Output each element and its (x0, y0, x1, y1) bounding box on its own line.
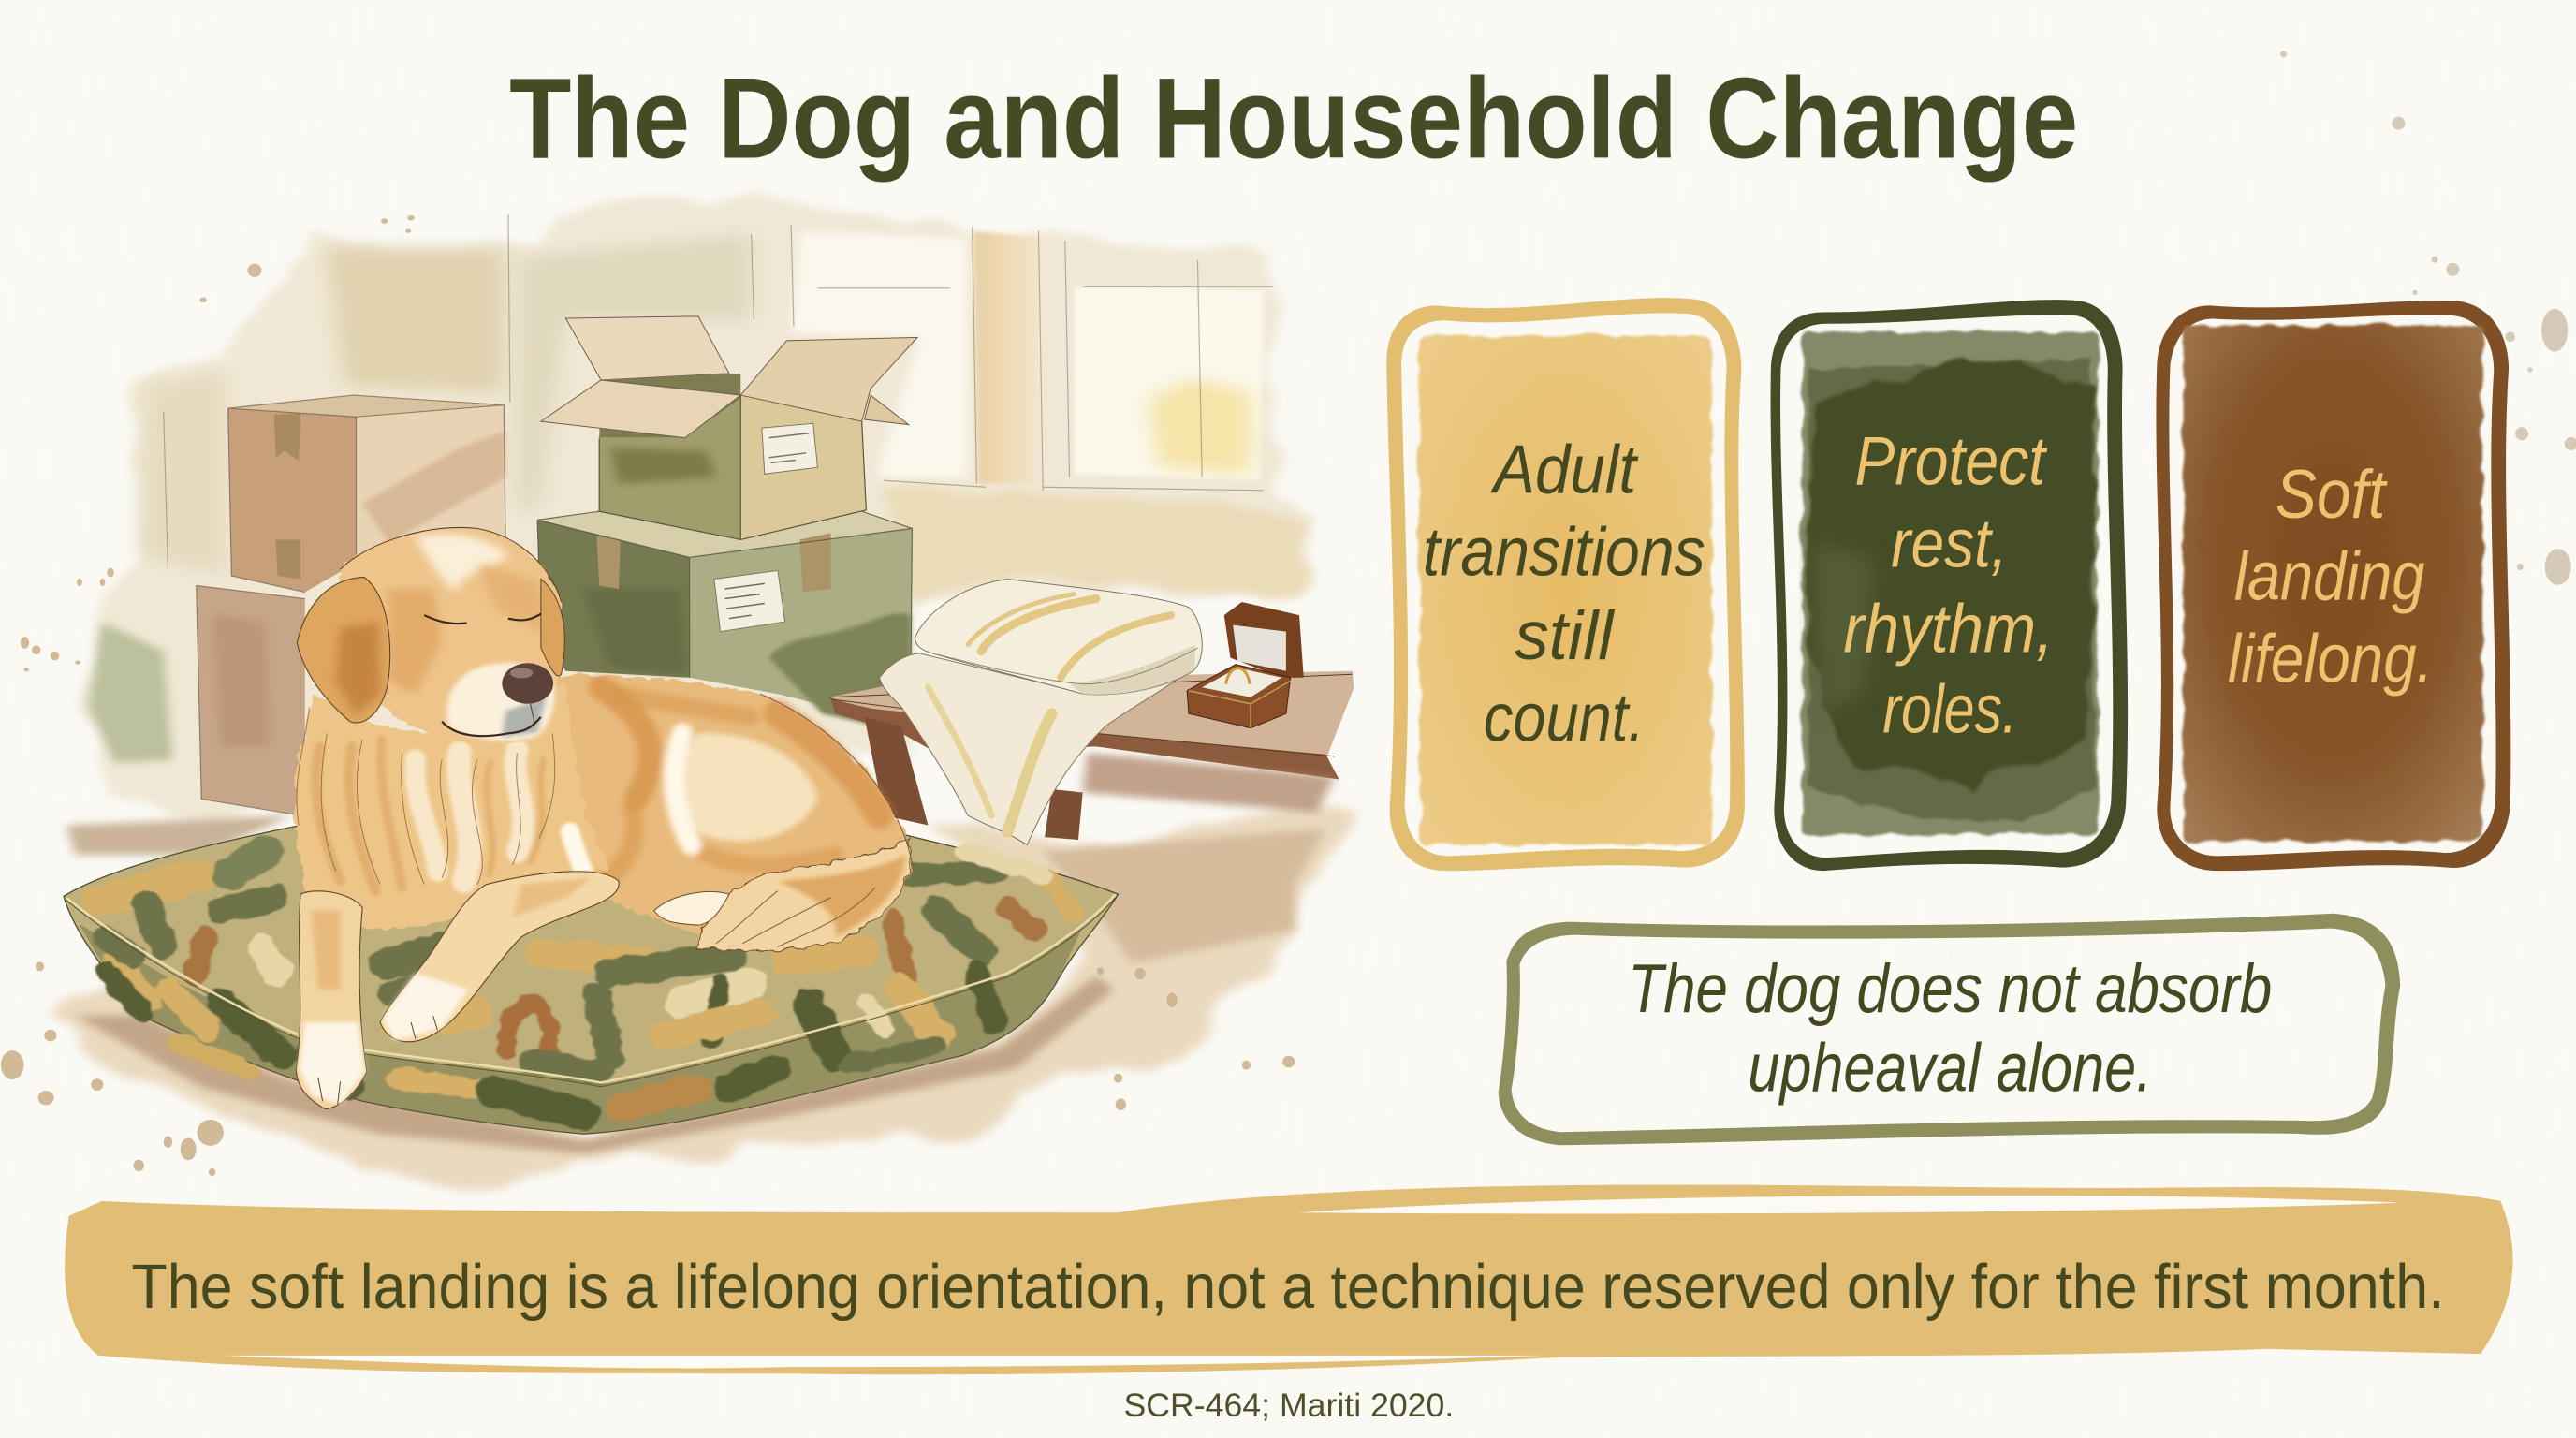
card text: still (1515, 596, 1616, 674)
card text: transitions (1423, 512, 1705, 590)
nose (502, 663, 553, 704)
camouflage dog cushion (64, 826, 1118, 1134)
card border (2156, 301, 2510, 871)
card text (1423, 431, 1705, 756)
callout border (1499, 914, 2400, 1145)
box: lower left (197, 586, 305, 815)
golden retriever (295, 527, 912, 1109)
ring box (1187, 602, 1304, 728)
background watercolor wash (49, 198, 1353, 1193)
illustration: golden retriever on camouflage cushion among moving boxes (1, 198, 1354, 1193)
card text: Soft (2276, 455, 2389, 533)
card text: Adult (1490, 431, 1639, 508)
card text: landing (2234, 537, 2425, 615)
card text (1843, 422, 2054, 748)
front legs (296, 872, 619, 1109)
card text: rest, (1891, 504, 2008, 581)
source citation: SCR-464; Mariti 2020. (1123, 1387, 1454, 1424)
rear body and tail (557, 674, 912, 951)
card text: Protect (1855, 422, 2048, 500)
callout text: The dog does not absorb (1628, 949, 2272, 1027)
card: Protect rest, rhythm, roles (1771, 300, 2128, 871)
chest mane (295, 681, 610, 929)
card border (1771, 300, 2128, 871)
watercolor wash (1802, 332, 2098, 835)
card: Soft landing lifelong (2156, 301, 2510, 871)
takeaway banner (65, 1185, 2513, 1374)
box: lower olive (537, 511, 912, 733)
card text: count. (1484, 679, 1645, 756)
head and muzzle (297, 527, 564, 744)
folded striped blanket (880, 579, 1202, 845)
ear: right (541, 579, 564, 676)
title: The Dog and Household Change (509, 54, 2078, 183)
banner brush shape (65, 1185, 2513, 1374)
watercolor wash (1419, 335, 1712, 844)
paint spatters (1, 215, 1295, 1176)
decorative spatters: top right (2280, 51, 2576, 585)
card: Adult transitions still count (1386, 298, 1745, 871)
callout: the dog does not absorb upheaval alone (1499, 914, 2400, 1145)
callout text: upheaval alone. (1748, 1028, 2152, 1106)
card text: rhythm, (1843, 590, 2054, 668)
card text (2228, 455, 2433, 697)
box: open top (541, 316, 917, 539)
camouflage patches (97, 852, 1074, 1114)
box: upper left (228, 395, 505, 593)
banner text: The soft landing is a lifelong orientation, not a technique reserved only for the first month. (131, 1253, 2445, 1322)
moving boxes (197, 316, 917, 815)
card text: lifelong. (2228, 619, 2433, 697)
card text: roles. (1882, 670, 2017, 748)
callout text (1628, 949, 2272, 1106)
ear: left (297, 577, 390, 723)
watercolor wash (2184, 325, 2482, 842)
card border (1386, 298, 1745, 871)
wooden bench (829, 671, 1354, 840)
cushion piping (66, 894, 1116, 1083)
